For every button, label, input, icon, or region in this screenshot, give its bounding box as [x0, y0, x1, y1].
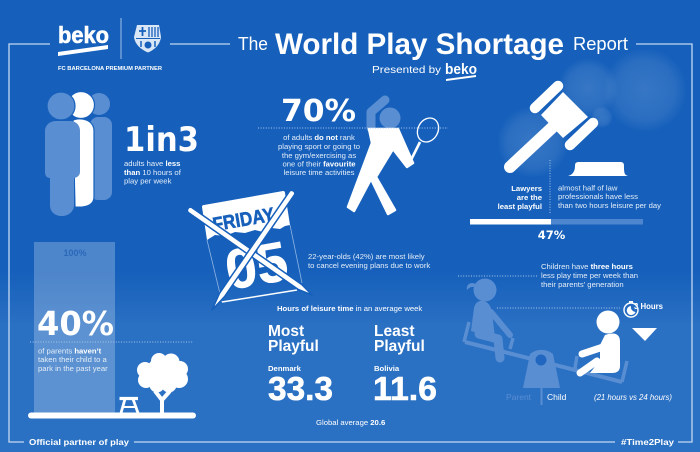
text: 21 hours vs 24 hours: (21 hours vs 24 hours) [594, 393, 672, 402]
text: lawyers heading: Lawyers [511, 184, 542, 193]
text: 70% description: leisure time activities [284, 168, 355, 177]
text: law professionals: almost half of law [558, 184, 618, 192]
text: law professionals: professionals have less [558, 192, 638, 201]
heading: hours of leisure time: Hours of leisure time in an average week [277, 304, 422, 313]
least playful: 11.6 [373, 370, 437, 407]
seesaw legend [506, 388, 567, 405]
icon: calendar: 05 [220, 229, 292, 302]
partner caption: FC BARCELONA PREMIUM PARTNER [58, 66, 162, 72]
text: 70% description: of adults do not rank [283, 133, 355, 142]
icon: child [580, 310, 620, 373]
text: adults less than 10 hours: play per week [124, 176, 172, 186]
text: lawyers heading: are the [517, 193, 543, 202]
text: 22-year-olds: to cancel evening plans due to work [308, 261, 430, 270]
icon: picnic table [120, 398, 138, 413]
icon: tree [137, 353, 188, 413]
title: The [238, 33, 268, 54]
icon: calendar [202, 191, 302, 302]
most playful: Playful [268, 338, 319, 355]
global average: Global average 20.6 [316, 418, 385, 427]
text: children three hours: their parents’ generation [541, 280, 624, 289]
ground [31, 412, 193, 418]
beko logo: beko [58, 22, 109, 48]
text: adults less than 10 hours: than 10 hours of [124, 168, 181, 177]
least playful: Bolivia [374, 364, 400, 373]
presented by: Presented by [372, 64, 442, 76]
text: 40% description: of parents haven’t [38, 346, 101, 356]
decorative glow [497, 48, 687, 178]
seesaw legend: Child [547, 392, 567, 402]
text: 40% description: taken their child to a [38, 355, 108, 364]
most playful: 33.3 [268, 370, 333, 407]
least playful [373, 323, 437, 407]
label: 3 hours: 3 Hours [634, 302, 664, 311]
icon: tennis player [348, 100, 443, 214]
text: 22-year-olds: 22-year-olds (42%) are most likely [308, 252, 425, 261]
icon: down triangle [632, 328, 657, 341]
icon: three people [45, 92, 112, 216]
text: 70% description: the gym/exercising as [282, 151, 356, 160]
panel: 1 in 3 adults [45, 92, 199, 216]
panel: parents and park [30, 242, 193, 416]
icon: calendar: FRIDAY [211, 204, 276, 236]
title: Report [573, 33, 628, 54]
text: 70% description: one of their favourite [282, 160, 356, 168]
panel: lawyers [470, 86, 661, 242]
footer: official partner of play: Official partner of play [29, 437, 129, 447]
icon: stopwatch [624, 301, 638, 317]
stat: 1 in 3: 1in3 [124, 120, 199, 160]
seesaw legend: Parent [506, 392, 532, 402]
icon: gavel [510, 86, 628, 176]
text: children three hours: less play time per week than [541, 271, 638, 280]
most playful [268, 323, 333, 407]
panel: Friday calendar [187, 190, 312, 310]
text: adults less than 10 hours: adults have less [124, 159, 180, 168]
panel: hours of leisure [268, 304, 437, 427]
divider [120, 18, 122, 59]
text: 40% description: park in the past year [38, 364, 108, 373]
bar chart: 47% [470, 219, 643, 224]
presented by [372, 61, 477, 81]
icon: FC Barcelona crest [134, 25, 161, 52]
stat: 40%: 40% [37, 304, 114, 343]
panel: seesaw parents vs children [458, 262, 672, 405]
text: law professionals: than two hours leisure per day [558, 201, 661, 210]
most playful: Most [268, 323, 304, 340]
icon: seesaw [464, 278, 627, 388]
stat: 70%: 70% [281, 94, 356, 129]
least playful: Least [374, 323, 414, 340]
icon: crossed-out pencils [187, 190, 312, 310]
footer: hashtag: #Time2Play [621, 437, 674, 447]
text: lawyers heading: least playful [498, 202, 542, 211]
bar: 100% [34, 242, 115, 414]
title: World Play Shortage [275, 28, 564, 61]
stat: 47%: 47% [538, 228, 566, 242]
label: 100%: 100% [63, 248, 87, 258]
panel: 70% of adults [258, 94, 448, 214]
least playful: Playful [374, 338, 425, 355]
presented by: beko [445, 61, 477, 78]
text: children three hours: Children have three hours [541, 262, 633, 271]
text: 70% description: playing sport or going to [278, 142, 360, 151]
most playful: Denmark [268, 364, 302, 373]
